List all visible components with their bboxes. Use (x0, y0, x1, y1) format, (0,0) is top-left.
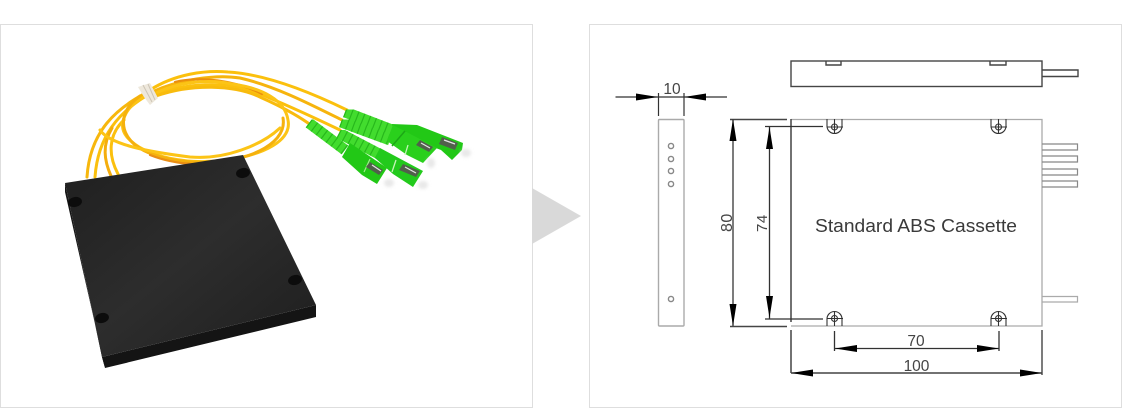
dimension: height 80: 80 (719, 213, 736, 232)
arrow: photo to drawing (532, 188, 581, 244)
panel: technical drawing (590, 24, 1122, 408)
main cassette outline (791, 119, 1042, 373)
output fibers (1042, 144, 1078, 302)
dimension: width 10 (616, 81, 727, 116)
ABS cassette box (65, 155, 316, 368)
panel: product photo (0, 24, 532, 408)
connector A (345, 112, 471, 160)
side view (658, 120, 684, 326)
dimension: length 100: 100 (904, 358, 930, 375)
top view (791, 61, 1078, 86)
dimension: hole spacing 74 (754, 126, 823, 319)
connector C (339, 133, 428, 189)
connector B (341, 122, 437, 168)
cable tie band (138, 83, 158, 105)
dimension: width 10: 10 (663, 81, 681, 98)
dimension: hole spacing 70 (834, 331, 999, 352)
dimension: height 80 (719, 119, 787, 326)
fiber bundle (87, 72, 347, 177)
caption: Standard ABS Cassette (815, 215, 1017, 236)
dimension: hole spacing 70: 70 (907, 333, 925, 350)
mounting holes (827, 119, 1007, 326)
dimension: hole spacing 74: 74 (754, 214, 771, 232)
connector D (309, 123, 394, 187)
dimension: length 100 (791, 330, 1042, 376)
